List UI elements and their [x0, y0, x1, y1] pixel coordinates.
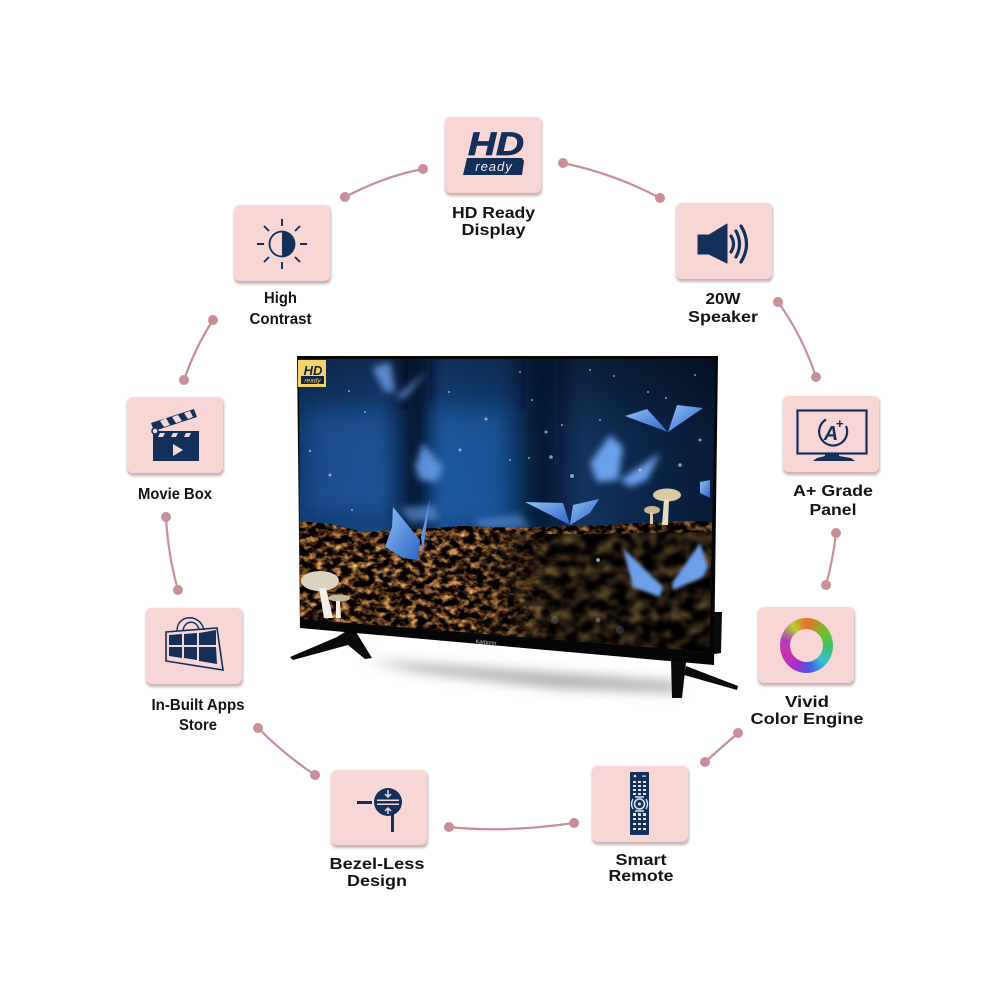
icon: clapperboard	[151, 409, 199, 461]
crisp butterflies	[385, 405, 710, 560]
icon: monitor with A+: A	[823, 423, 838, 445]
blurred butterflies	[372, 362, 660, 528]
connector: Vivid to Remote	[700, 728, 743, 767]
television	[290, 350, 738, 698]
label: 20W Speaker	[688, 291, 758, 326]
label: A+ Grade Panel: Panel	[810, 502, 856, 519]
label: Smart Remote: Remote	[608, 868, 674, 885]
icon: monitor with A+: +	[836, 416, 844, 431]
label: A+ Grade Panel: A+ Grade	[793, 483, 873, 500]
icon: app store bag	[166, 618, 223, 670]
label: HD Ready Display: HD Ready	[452, 205, 535, 222]
panel: A+ Grade Panel	[783, 396, 880, 519]
label: High Contrast	[250, 290, 312, 328]
label: Bezel-Less Design: Bezel-Less	[330, 856, 425, 873]
label: High Contrast: High	[264, 290, 297, 307]
label: HD Ready Display	[452, 205, 535, 239]
lower blurred butterfly	[623, 543, 708, 597]
icon: HD ready	[463, 126, 524, 175]
panel: Smart Remote	[592, 766, 689, 885]
icon: bezel-less	[357, 788, 402, 832]
label: 20W Speaker: Speaker	[688, 309, 758, 326]
HD ready badge: HD	[304, 363, 323, 378]
icon: HD ready: HD	[468, 126, 524, 162]
TV stand: left	[290, 630, 372, 660]
icon: HD ready: ready	[475, 159, 513, 174]
label: High Contrast: Contrast	[250, 311, 312, 328]
label: HD Ready Display: Display	[462, 222, 526, 239]
panel: In-Built Apps Store	[146, 608, 245, 734]
floor shadow	[365, 660, 680, 692]
label: Bezel-Less Design: Design	[347, 873, 407, 890]
TV stand: right	[671, 660, 738, 698]
label: Vivid Color Engine	[750, 694, 864, 728]
icon: contrast sun	[257, 219, 307, 269]
connector: Apps to Movie Box	[161, 512, 183, 595]
icon: rainbow ring	[780, 618, 836, 674]
label: In-Built Apps Store	[152, 697, 245, 734]
soundbar block	[708, 612, 722, 655]
label: In-Built Apps Store: Store	[179, 717, 217, 734]
TV screen image	[296, 350, 720, 666]
connector: High Contrast to HD Ready	[340, 164, 428, 202]
HD ready badge	[298, 360, 326, 387]
icon: speaker	[698, 224, 746, 263]
label: Vivid Color Engine: Color Engine	[750, 711, 864, 728]
label: Smart Remote	[608, 852, 674, 885]
label: A+ Grade Panel	[793, 483, 873, 519]
panel: High Contrast	[234, 205, 331, 328]
brand logo: Karbonn	[475, 639, 497, 647]
connector: Speaker to A+ Panel	[773, 297, 821, 382]
panel: Bezel-Less Design	[330, 770, 428, 890]
connector: Movie Box to High Contrast	[179, 315, 218, 385]
label: Bezel-Less Design	[330, 856, 425, 890]
panel: HD Ready Display	[445, 117, 542, 239]
label: Movie Box: Movie Box	[138, 486, 212, 503]
label: In-Built Apps Store: In-Built Apps	[152, 697, 245, 714]
label: 20W Speaker: 20W	[706, 291, 741, 308]
icon: remote control	[630, 772, 649, 835]
connector: Remote to Bezel	[444, 818, 579, 832]
forest glow	[310, 350, 559, 530]
mushrooms	[301, 488, 681, 618]
panel: 20W Speaker	[676, 203, 773, 326]
label: Vivid Color Engine: Vivid	[785, 694, 829, 711]
panel: Movie Box	[127, 397, 224, 503]
connector: A+ Panel to Vivid	[821, 528, 841, 590]
soil: out-of-focus right part	[484, 532, 712, 652]
panel: Vivid Color Engine	[750, 607, 864, 728]
connector: Bezel to Apps	[253, 723, 320, 780]
HD ready badge: ready	[304, 378, 321, 384]
bokeh sparkles	[309, 369, 702, 634]
soil	[300, 521, 712, 652]
connector: HD Ready to Speaker	[558, 158, 665, 203]
TV frame	[297, 356, 718, 665]
label: Smart Remote: Smart	[616, 852, 667, 869]
icon: monitor with A+	[798, 410, 866, 461]
